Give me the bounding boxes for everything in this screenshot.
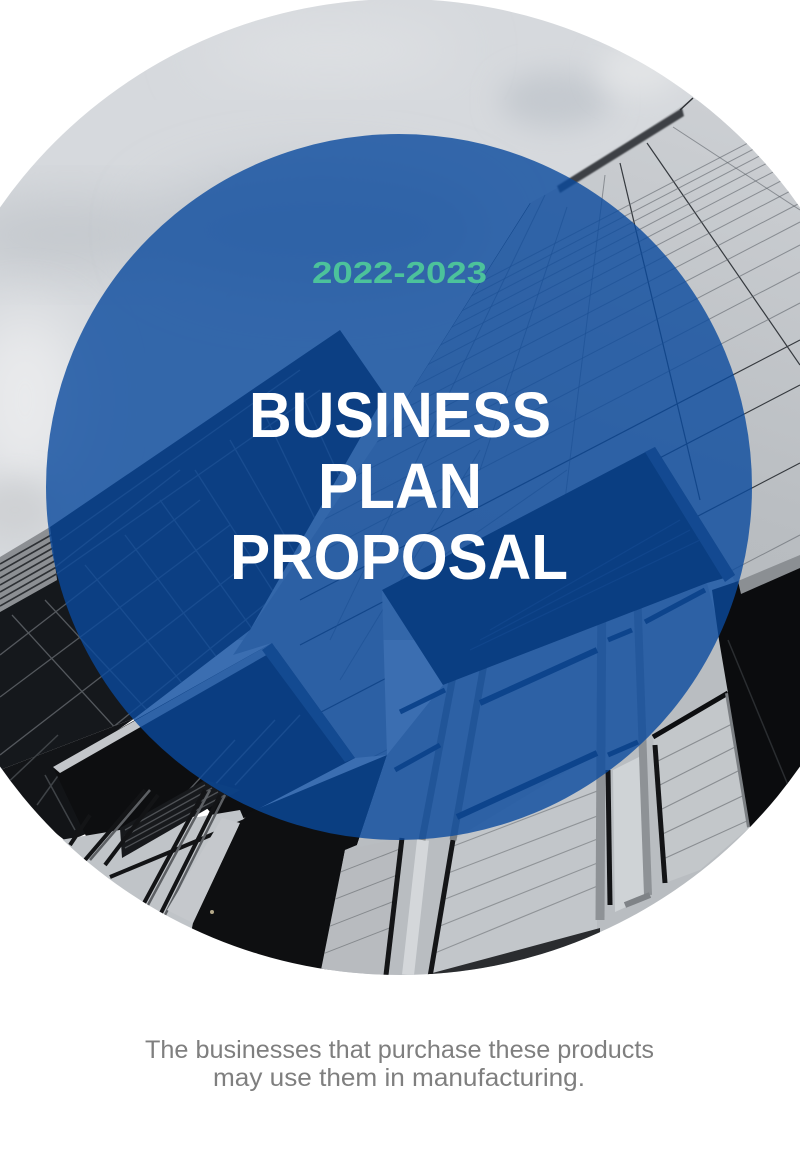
central black pier	[167, 755, 387, 985]
left tower with stripes and grid	[0, 330, 385, 842]
upper overhang box	[382, 447, 735, 685]
caption	[145, 1036, 654, 1092]
title	[230, 379, 568, 593]
lower facade and windows	[321, 588, 782, 975]
blue translucent circle	[46, 134, 752, 840]
caption: may use them in manufacturing.	[213, 1064, 585, 1092]
caption: The businesses that purchase these products	[145, 1036, 654, 1064]
antenna mast	[557, 98, 693, 193]
main tower facade	[233, 98, 800, 795]
lower left glass panes	[62, 781, 244, 931]
right dark underside	[712, 555, 800, 827]
title: PLAN	[318, 450, 482, 522]
title: PROPOSAL	[230, 521, 568, 593]
date label: 2022-2023	[312, 255, 487, 290]
title: BUSINESS	[249, 379, 551, 451]
left overhang box	[53, 643, 355, 855]
sky with clouds	[0, 0, 800, 640]
